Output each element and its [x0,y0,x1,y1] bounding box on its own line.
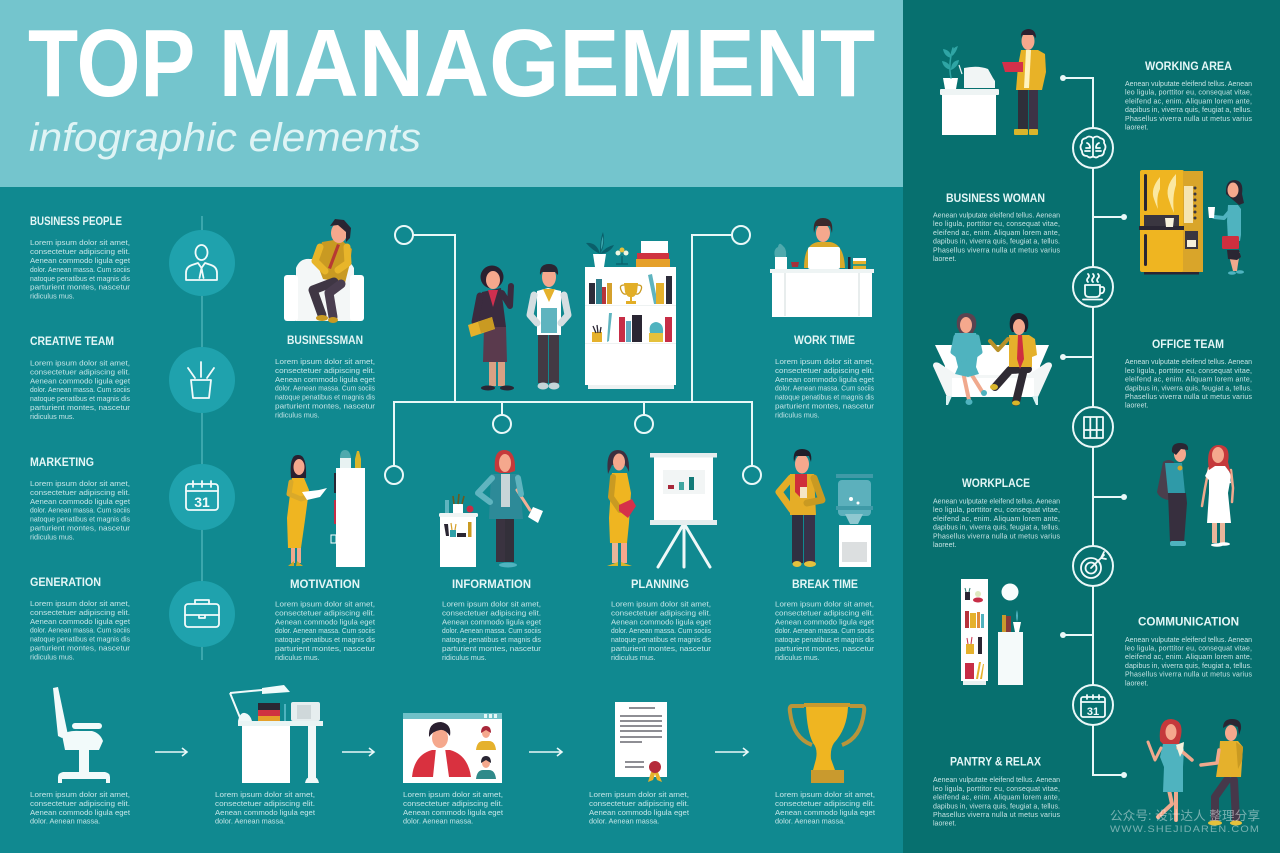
icon: business person [169,230,235,296]
text: work time: Aenean commodo ligula eget [775,375,874,384]
text: step 2 [215,790,315,826]
text: businessman: ridiculus mus. [275,410,320,419]
text: business woman: BUSINESS WOMAN [946,191,1045,205]
text: information: parturient montes, nascetur [442,644,542,653]
watermark [1110,808,1260,835]
text: creative team: natoque penatibus et magnis dis [30,394,130,403]
text: working area [1125,59,1252,132]
text: businessman: natoque penatibus et magnis dis [275,393,375,402]
text: planning: dolor. Aenean massa. Cum sociis [611,626,711,635]
icon: calendar [169,464,235,530]
text: business people: consectetuer adipiscing elit. [30,247,130,256]
illustration: dancing couple [1148,719,1243,826]
right timeline [1060,75,1127,778]
text: communication: eleifend ac, enim. Aliquam lorem ante, [1125,654,1252,661]
text: pantry and relax: Phasellus viverra nulla ut metus varius [933,812,1060,819]
watermark: WWW.SHEJIDAREN.COM [1110,824,1260,835]
text: step 2: Lorem ipsum dolor sit amet, [215,790,315,799]
text: work time [775,333,875,419]
text: businessman: Lorem ipsum dolor sit amet, [275,357,375,366]
text: generation: consectetuer adipiscing elit. [30,608,130,617]
text: marketing: Lorem ipsum dolor sit amet, [30,479,130,488]
text: creative team: parturient montes, nascetur [30,403,131,412]
illustration: businessman in armchair [284,219,364,323]
illustration: bookshelf with plant and books [585,232,676,389]
text: work time: dolor. Aenean massa. Cum sociis [775,384,874,393]
text: business woman: Aenean vulputate eleifend tellus. Aenean [933,212,1060,220]
text: businessman [275,333,376,419]
text: business woman: dapibus in, viverra quis, feugiat a, tellus. [933,239,1060,246]
text: business woman: eleifend ac, enim. Aliquam lorem ante, [933,230,1060,237]
text: businessman: consectetuer adipiscing elit. [275,366,375,375]
illustration: woman with desk and paper [439,450,543,568]
text: generation: natoque penatibus et magnis dis [30,635,130,644]
text: working area: eleifend ac, enim. Aliquam lorem ante, [1125,98,1252,105]
illustration: man at desk with laptop [770,218,874,317]
text: business people: ridiculus mus. [30,292,75,301]
text: workplace: Aenean vulputate eleifend tellus. Aenean [933,498,1060,506]
text: motivation: MOTIVATION [290,577,360,591]
text: motivation: ridiculus mus. [275,653,320,662]
icon: calendar [1073,685,1113,725]
illustration: video call window [403,713,502,783]
text: information: natoque penatibus et magnis dis [442,635,541,644]
text: work time: consectetuer adipiscing elit. [775,366,874,375]
text: generation [30,575,131,661]
text: communication: dapibus in, viverra quis, feugiat a, tellus. [1125,663,1252,670]
text: break time: consectetuer adipiscing elit. [775,608,874,617]
text: break time: natoque penatibus et magnis dis [775,635,874,644]
text: business people: dolor. Aenean massa. Cum sociis [30,265,130,274]
icon: pencil pot [169,347,235,413]
text: business woman: leo ligula, porttitor eu, consequat vitae, [933,221,1060,228]
text: generation: Aenean commodo ligula eget [30,617,130,626]
text: planning: parturient montes, nascetur [611,644,712,653]
shelf books bottom row [592,313,672,342]
icon: coffee cup [1073,267,1113,307]
text: step 4: Aenean commodo ligula eget [589,808,689,817]
text: workplace: Phasellus viverra nulla ut metus varius [933,533,1060,540]
text: planning: ridiculus mus. [611,653,656,662]
text: creative team: ridiculus mus. [30,412,75,421]
text: break time: dolor. Aenean massa. Cum sociis [775,626,874,635]
text: generation: GENERATION [30,575,101,589]
text: break time: parturient montes, nascetur [775,644,875,653]
text: motivation: dolor. Aenean massa. Cum sociis [275,626,375,635]
text: step 5: Aenean commodo ligula eget [775,808,875,817]
text: businessman: parturient montes, nascetur [275,402,376,410]
title: MANAGEMENT [218,9,875,117]
text: work time: WORK TIME [794,333,855,347]
text: business people: Lorem ipsum dolor sit amet, [30,238,130,247]
text: workplace: leo ligula, porttitor eu, consequat vitae, [933,507,1060,514]
title: TOP [28,9,195,116]
text: generation: Lorem ipsum dolor sit amet, [30,599,130,608]
illustration: student and woman in white [1157,443,1233,547]
icon: brain [1073,128,1113,168]
text: planning: Lorem ipsum dolor sit amet, [611,600,711,608]
text: information: consectetuer adipiscing elit. [442,608,541,617]
illustration: man at water cooler [779,449,873,567]
text: creative team: consectetuer adipiscing elit. [30,367,130,376]
text: break time: Lorem ipsum dolor sit amet, [775,600,874,608]
text: creative team: Aenean commodo ligula eget [30,376,130,385]
text: creative team: dolor. Aenean massa. Cum sociis [30,385,130,394]
text: business people: BUSINESS PEOPLE [30,214,122,228]
illustration: trophy [790,703,864,783]
text: workplace: laoreet. [933,542,956,549]
text: step 2: dolor. Aenean massa. [215,817,285,826]
text: motivation: consectetuer adipiscing elit. [275,608,375,617]
text: motivation: parturient montes, nascetur [275,644,376,653]
text: step 5: Lorem ipsum dolor sit amet, [775,790,875,799]
text: creative team: Lorem ipsum dolor sit amet, [30,358,130,368]
text: marketing: dolor. Aenean massa. Cum sociis [30,506,130,515]
text: step 4 [589,790,689,826]
text: workplace [933,476,1060,549]
text: step 4: Lorem ipsum dolor sit amet, [589,790,689,799]
text: office team: leo ligula, porttitor eu, consequat vitae, [1125,368,1252,375]
shelf books top row [589,274,672,304]
text: business woman: Phasellus viverra nulla ut metus varius [933,247,1060,254]
watermark: 公众号: 设计达人 整理分享 [1110,808,1260,823]
text: work time: ridiculus mus. [775,410,820,419]
text: pantry and relax: leo ligula, porttitor eu, consequat vitae, [933,786,1060,793]
text: communication: COMMUNICATION [1138,615,1239,629]
text: step 3: Lorem ipsum dolor sit amet, [403,790,503,799]
text: office team: laoreet. [1125,403,1148,410]
text: step 3: dolor. Aenean massa. [403,817,473,826]
text: information [442,577,542,662]
text: information: INFORMATION [452,577,531,591]
text: planning: natoque penatibus et magnis dis [611,635,711,644]
text: pantry and relax: eleifend ac, enim. Aliquam lorem ante, [933,795,1060,802]
text: step 1: Aenean commodo ligula eget [30,808,130,817]
text: step 5: consectetuer adipiscing elit. [775,799,875,808]
arrow 1 [155,748,187,756]
text: marketing: ridiculus mus. [30,532,75,541]
text: working area: leo ligula, porttitor eu, consequat vitae, [1125,90,1252,97]
illustration: woman presenting at flip chart [607,450,717,567]
text: working area: laoreet. [1125,124,1148,132]
illustration: woman with folder [468,266,514,390]
text: business people [30,214,131,301]
text: step 1: Lorem ipsum dolor sit amet, [30,790,130,799]
text: motivation: natoque penatibus et magnis dis [275,635,375,644]
text: communication [1125,615,1252,687]
text: information: Lorem ipsum dolor sit amet, [442,600,541,608]
text: planning: consectetuer adipiscing elit. [611,608,711,617]
text: step 5 [775,790,875,826]
text: communication: laoreet. [1125,680,1148,687]
text: motivation: Lorem ipsum dolor sit amet, [275,600,375,608]
text: step 1 [30,790,130,826]
text: businessman: dolor. Aenean massa. Cum sociis [275,384,375,393]
text: office team: dapibus in, viverra quis, feugiat a, tellus. [1125,385,1252,392]
text: work time: natoque penatibus et magnis dis [775,393,874,402]
text: planning: Aenean commodo ligula eget [611,617,711,626]
text: office team: Phasellus viverra nulla ut metus varius [1125,394,1252,401]
icon: briefcase [169,581,235,647]
text: pantry and relax: PANTRY & RELAX [950,754,1041,768]
text: pantry and relax: Aenean vulputate eleifend tellus. Aenean [933,777,1060,784]
text: workplace: WORKPLACE [962,476,1030,490]
icon: calendar: 31 [1087,706,1099,718]
text: pantry and relax [933,754,1060,828]
text: information: ridiculus mus. [442,653,487,662]
text: break time: BREAK TIME [792,577,858,591]
text: creative team [30,334,131,421]
text: information: Aenean commodo ligula eget [442,617,541,626]
text: break time [775,577,875,662]
text: work time: parturient montes, nascetur [775,402,875,410]
illustration: desk with lamp and books [230,685,323,783]
illustration: copier desk and man with tablet [940,29,1046,135]
text: creative team: CREATIVE TEAM [30,334,114,348]
text: business people: natoque penatibus et magnis dis [30,274,130,283]
text: businessman: Aenean commodo ligula eget [275,375,375,384]
text: workplace: dapibus in, viverra quis, feugiat a, tellus. [933,525,1060,532]
text: workplace: eleifend ac, enim. Aliquam lorem ante, [933,516,1060,523]
text: marketing: parturient montes, nascetur [30,524,131,532]
text: break time: ridiculus mus. [775,653,820,662]
text: information: dolor. Aenean massa. Cum sociis [442,626,541,635]
text: business woman [933,191,1060,263]
text: marketing: consectetuer adipiscing elit. [30,488,130,497]
illustration: shelf and side cabinet with lamp [961,579,1023,685]
text: step 3: Aenean commodo ligula eget [403,808,503,817]
text: step 3: consectetuer adipiscing elit. [403,799,503,808]
text: working area: WORKING AREA [1145,59,1232,73]
text: communication: Phasellus viverra nulla ut metus varius [1125,672,1252,679]
text: step 1: consectetuer adipiscing elit. [30,799,130,808]
text: motivation [275,577,376,662]
icon: target [1073,546,1113,586]
text: generation: parturient montes, nascetur [30,644,131,652]
text: communication: leo ligula, porttitor eu, consequat vitae, [1125,645,1252,652]
text: office team: eleifend ac, enim. Aliquam lorem ante, [1125,377,1252,384]
text: working area: Aenean vulputate eleifend tellus. Aenean [1125,81,1252,88]
text: marketing [30,455,131,541]
illustration: vending machine and woman with cup [1139,170,1244,275]
text: marketing: MARKETING [30,455,94,469]
panel: header band [0,0,903,187]
text: marketing: natoque penatibus et magnis dis [30,515,130,524]
illustration: certificate [615,702,667,782]
text: office team: Aenean vulputate eleifend tellus. Aenean [1125,359,1252,366]
text: planning: PLANNING [631,577,689,591]
text: step 4: consectetuer adipiscing elit. [589,799,689,808]
text: business woman: laoreet. [933,256,956,263]
text: step 2: Aenean commodo ligula eget [215,808,315,817]
text: pantry and relax: dapibus in, viverra quis, feugiat a, tellus. [933,803,1060,810]
text: generation: dolor. Aenean massa. Cum sociis [30,626,130,635]
text: motivation: Aenean commodo ligula eget [275,617,375,626]
text: working area: Phasellus viverra nulla ut metus varius [1125,116,1252,123]
left icon timeline [169,216,235,660]
illustration: woman reading by cabinet [287,450,365,567]
org chart connectors [385,226,761,484]
text: generation: ridiculus mus. [30,652,75,661]
text: step 5: dolor. Aenean massa. [775,817,845,826]
text: pantry and relax: laoreet. [933,821,956,828]
arrow 3 [529,748,562,756]
text: step 3 [403,790,503,826]
panel: right timeline background [903,0,1280,853]
text: communication: Aenean vulputate eleifend tellus. Aenean [1125,637,1252,644]
text: step 4: dolor. Aenean massa. [589,817,659,826]
text: office team [1125,337,1252,410]
subtitle: infographic elements [29,116,421,160]
text: business people: parturient montes, nascetur [30,283,131,292]
icon: calendar: 31 [194,494,210,510]
illustration: office chair [53,687,110,783]
text: business people: Aenean commodo ligula eget [30,256,130,265]
text: planning [611,577,712,662]
text: businessman: BUSINESSMAN [287,333,363,347]
illustration: couple on sofa [933,313,1052,406]
arrow 2 [342,748,374,756]
illustration: man holding book [530,264,568,390]
text: working area: dapibus in, viverra quis, feugiat a, tellus. [1125,107,1252,114]
arrow 4 [715,748,748,756]
text: step 1: dolor. Aenean massa. [30,817,100,826]
text: break time: Aenean commodo ligula eget [775,617,874,626]
text: office team: OFFICE TEAM [1152,337,1224,351]
icon: lockers [1073,407,1113,447]
text: step 2: consectetuer adipiscing elit. [215,799,315,808]
text: marketing: Aenean commodo ligula eget [30,497,130,506]
text: work time: Lorem ipsum dolor sit amet, [775,357,874,366]
